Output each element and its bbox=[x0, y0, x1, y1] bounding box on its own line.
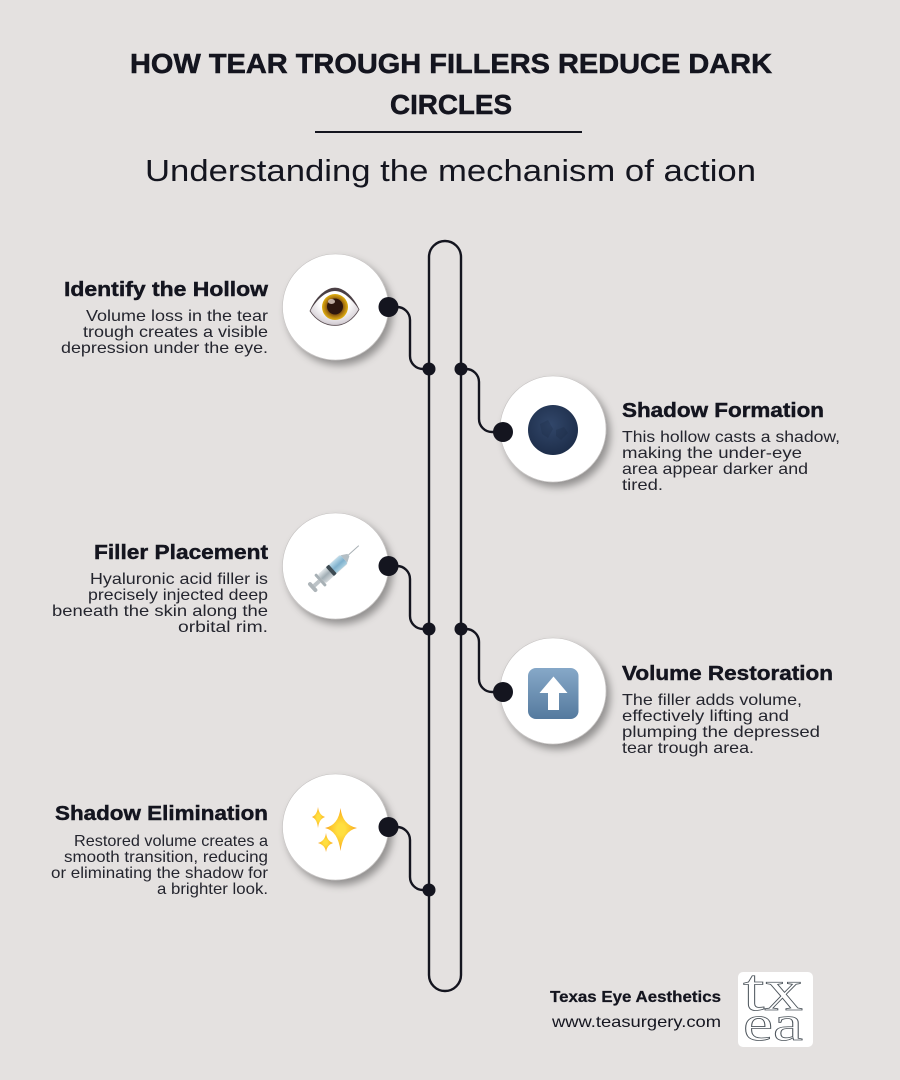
icon: sparkles bbox=[312, 807, 357, 852]
step 3 body text: beneath the skin along the bbox=[52, 603, 268, 620]
step 5 body text: smooth transition, reducing bbox=[64, 849, 268, 866]
step 4 body text bbox=[622, 692, 820, 757]
step 4 body text: effectively lifting and bbox=[622, 708, 789, 725]
icon: up arrow bbox=[528, 668, 578, 719]
step 1 body text: depression under the eye. bbox=[61, 340, 268, 357]
step 3: filler placement bbox=[52, 513, 436, 636]
step 4 body text: tear trough area. bbox=[622, 740, 754, 757]
step 2 icon circle bbox=[500, 376, 606, 482]
step 5 icon circle bbox=[282, 774, 388, 880]
footer brand text bbox=[550, 989, 721, 1031]
connector 4 bbox=[454, 622, 513, 702]
connector 5 bbox=[378, 817, 436, 896]
timeline track bbox=[429, 241, 461, 991]
step 2: shadow formation bbox=[454, 362, 840, 494]
title bbox=[130, 48, 772, 120]
step 1 heading: Identify the Hollow bbox=[64, 278, 268, 301]
step 1 body text: Volume loss in the tear bbox=[86, 308, 269, 325]
step 4 body text: The filler adds volume, bbox=[622, 692, 802, 709]
step 2 body text: tired. bbox=[622, 477, 663, 494]
connector 1 bbox=[378, 297, 436, 376]
step 2 body text: This hollow casts a shadow, bbox=[622, 429, 840, 446]
footer brand text: www.teasurgery.com bbox=[551, 1014, 721, 1031]
step 2 body text: making the under-eye bbox=[622, 445, 802, 462]
step 1: identify the hollow bbox=[61, 254, 436, 376]
title: HOW TEAR TROUGH FILLERS REDUCE DARK bbox=[130, 48, 772, 79]
step 3 body text: orbital rim. bbox=[178, 619, 268, 636]
connector 3 bbox=[378, 556, 436, 636]
logo bbox=[738, 957, 813, 1051]
icon: syringe bbox=[306, 540, 364, 594]
step 5 heading: Shadow Elimination bbox=[55, 802, 268, 825]
step 5 body text: or eliminating the shadow for bbox=[51, 865, 269, 882]
step 2 body text bbox=[622, 429, 840, 494]
footer brand text: Texas Eye Aesthetics bbox=[550, 989, 721, 1006]
step 3 body text: Hyaluronic acid filler is bbox=[90, 571, 268, 588]
title: CIRCLES bbox=[390, 89, 512, 120]
step 3 body text bbox=[52, 571, 268, 636]
logo: ea bbox=[743, 995, 803, 1051]
step 3 body text: precisely injected deep bbox=[88, 587, 268, 604]
step 5 body text: a brighter look. bbox=[157, 881, 268, 898]
icon: eye bbox=[310, 288, 359, 326]
connector 2 bbox=[454, 362, 513, 442]
subtitle: Understanding the mechanism of action bbox=[145, 153, 756, 188]
step 5: shadow elimination bbox=[51, 774, 436, 898]
step 4 heading: Volume Restoration bbox=[622, 662, 833, 685]
step 1 body text bbox=[61, 308, 269, 357]
step 5 body text bbox=[51, 833, 269, 898]
logo: tx bbox=[743, 957, 803, 1023]
step 4: volume restoration bbox=[454, 622, 833, 757]
icon: new moon bbox=[528, 405, 578, 455]
step 4 body text: plumping the depressed bbox=[622, 724, 820, 741]
step 3 heading: Filler Placement bbox=[94, 541, 268, 564]
title underline bbox=[315, 131, 582, 133]
step 3 icon circle bbox=[282, 513, 388, 619]
step 1 body text: trough creates a visible bbox=[83, 324, 268, 341]
step 2 heading: Shadow Formation bbox=[622, 399, 824, 422]
step 5 body text: Restored volume creates a bbox=[74, 833, 268, 850]
step 1 icon circle bbox=[282, 254, 388, 360]
step 2 body text: area appear darker and bbox=[622, 461, 808, 478]
step 4 icon circle bbox=[500, 638, 606, 744]
